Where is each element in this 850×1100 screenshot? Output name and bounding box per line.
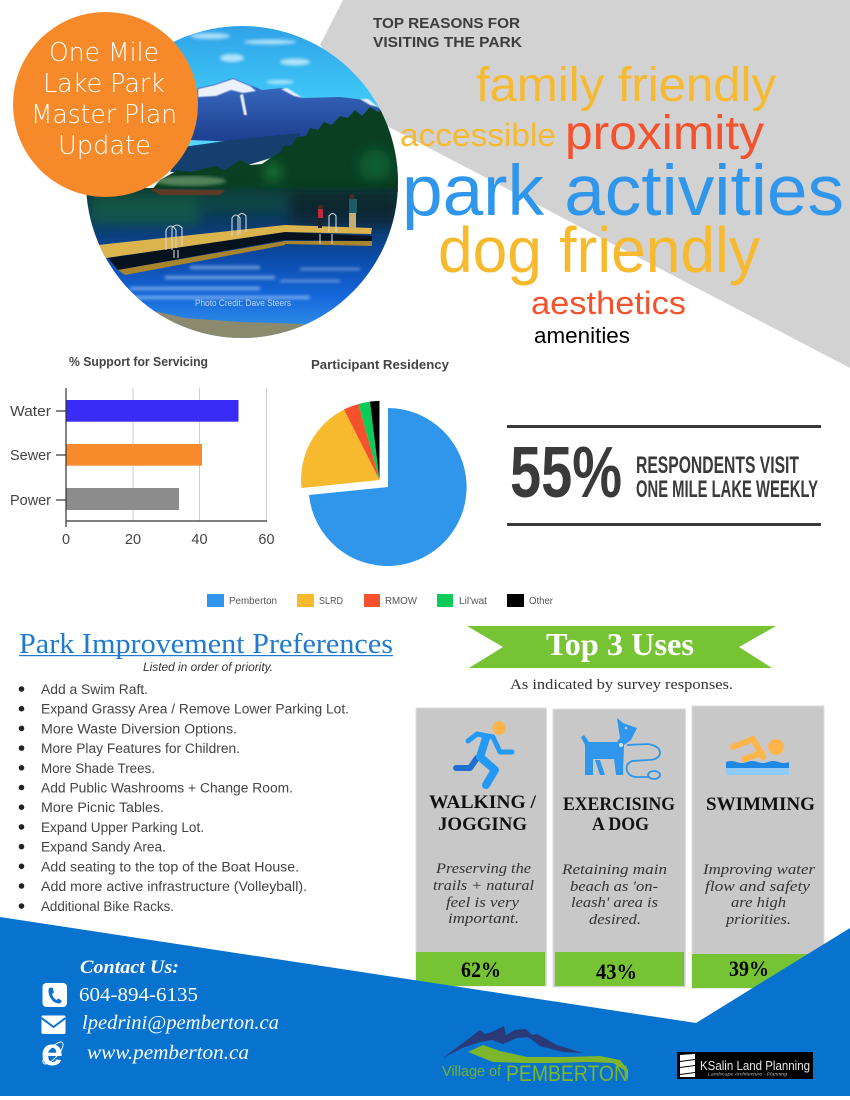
logo: KSalin Land Planning: KSalin Land Planning [700,1059,810,1073]
card description: flow and safety [705,879,810,895]
title badge: Update [58,131,151,161]
pie chart: participant residency [207,357,554,607]
logo: Village of Pemberton [442,1026,628,1086]
icon: runner [456,721,512,785]
word cloud: accessible [400,117,556,153]
banner: top 3 uses: Top 3 Uses [546,626,694,662]
photo credit: Photo Credit: Dave Steers [195,298,291,309]
word cloud: aesthetics [531,285,686,321]
panel: top reasons background [320,0,850,368]
card percent: 43% [596,959,637,984]
website: www.pemberton.ca [87,1042,249,1064]
card description: desired. [589,912,641,928]
bullet list [19,682,349,914]
card: exercising a dog [553,709,686,987]
heading: Park Improvement Preferences [19,628,393,660]
card description [561,862,667,928]
card description: leash' area is [571,895,658,911]
card title [429,792,537,835]
pie legend [207,594,554,607]
subheading: Listed in order of priority. [143,662,273,674]
logo: Village of Pemberton: Village of [442,1063,502,1080]
bullet list: More Play Features for Children. [41,741,240,756]
panel: park improvement preferences [19,628,393,914]
chart title: Participant Residency [311,357,450,372]
icon: web browser: e [41,1032,63,1074]
bullet list: More Shade Trees. [41,761,155,776]
card title: JOGGING [438,814,527,835]
word cloud: proximity [565,107,764,160]
title badge [13,12,198,197]
pie legend: RMOW [385,596,418,607]
stat callout: 55 percent [507,425,821,526]
card description [433,861,534,927]
heading: top reasons: VISITING THE PARK [373,35,523,51]
word cloud: family friendly [476,59,776,112]
word cloud: amenities [534,323,630,348]
bullet list: More Waste Diversion Options. [41,721,237,736]
email: lpedrini@pemberton.ca [82,1012,279,1034]
card description: feel is very [446,895,519,911]
bullet list: Expand Upper Parking Lot. [41,820,204,835]
card: swimming [692,706,824,988]
bar chart: support for servicing [10,355,275,548]
title badge: One Mile [49,38,159,68]
bullet list: Add seating to the top of the Boat House. [41,859,299,874]
bullet list: Add Public Washrooms + Change Room. [41,780,293,796]
card description: priorities. [725,912,791,928]
title badge: Lake Park [43,69,165,99]
bullet list: Add a Swim Raft. [41,682,148,697]
banner subtitle: As indicated by survey responses. [510,677,733,693]
card title [563,794,675,835]
icon: envelope [42,1016,66,1034]
logo: KSalin Land Planning [677,1052,813,1079]
logo: KSalin Land Planning: Landscape Architecture - Planning [708,1072,788,1076]
card description: beach as 'on- [570,879,658,895]
bar chart: support for servicing: 0 [62,532,70,548]
contact heading: Contact Us: [80,957,179,978]
pie legend: Lil'wat [459,596,487,607]
logo: Village of Pemberton: PEMBERTON [506,1061,628,1086]
photo: lake and dock [80,20,405,345]
bullet list: Expand Sandy Area. [41,840,166,855]
card title: WALKING / [429,792,537,813]
card percent: 62% [461,957,501,982]
bar chart: support for servicing: Water [10,404,51,420]
card percent: 39% [729,956,769,981]
bullet list: Expand Grassy Area / Remove Lower Parking Lot. [41,702,349,717]
pie legend: SLRD [319,596,343,607]
stat callout: 55 percent: 55% [510,433,622,513]
card description: Preserving the [435,861,531,877]
pie legend: Pemberton [229,596,277,607]
card description: trails + natural [433,878,534,894]
bar chart: support for servicing: 40 [191,532,208,548]
card description: Retaining main [561,862,667,878]
banner: top 3 uses [467,626,776,668]
dock [98,194,372,275]
heading: top reasons: TOP REASONS FOR [373,16,521,32]
bar chart: support for servicing: 60 [258,532,275,548]
bar chart: support for servicing: Power [10,493,51,509]
chart title: % Support for Servicing [69,355,208,369]
card title: EXERCISING [563,794,675,815]
card description: Improving water [702,862,815,878]
card description: important. [448,911,519,927]
pie legend: Other [529,596,554,607]
word cloud [400,59,844,348]
phone number: 604-894-6135 [79,984,198,1006]
contact block [40,957,279,1074]
card: walking / jogging [416,708,546,986]
card title: A DOG [592,814,649,835]
bar chart: support for servicing: Sewer [10,448,51,464]
footer: blue background [0,917,850,1096]
word cloud: dog friendly [438,214,760,286]
icon: swimmer [726,739,789,775]
heading: top reasons [373,16,523,51]
card description [702,862,815,928]
word cloud: park activities [402,152,844,231]
title badge: Master Plan [31,100,177,130]
bar chart: support for servicing: 20 [125,532,141,548]
bullet list: Add more active infrastructure (Volleyball). [41,879,307,894]
bullet list: Additional Bike Racks. [41,899,174,914]
bullet list: More Picnic Tables. [41,800,164,815]
icon: dog on leash [581,718,660,779]
icon: phone [42,983,67,1007]
card title: SWIMMING [706,794,815,815]
card description: are high [731,895,786,911]
